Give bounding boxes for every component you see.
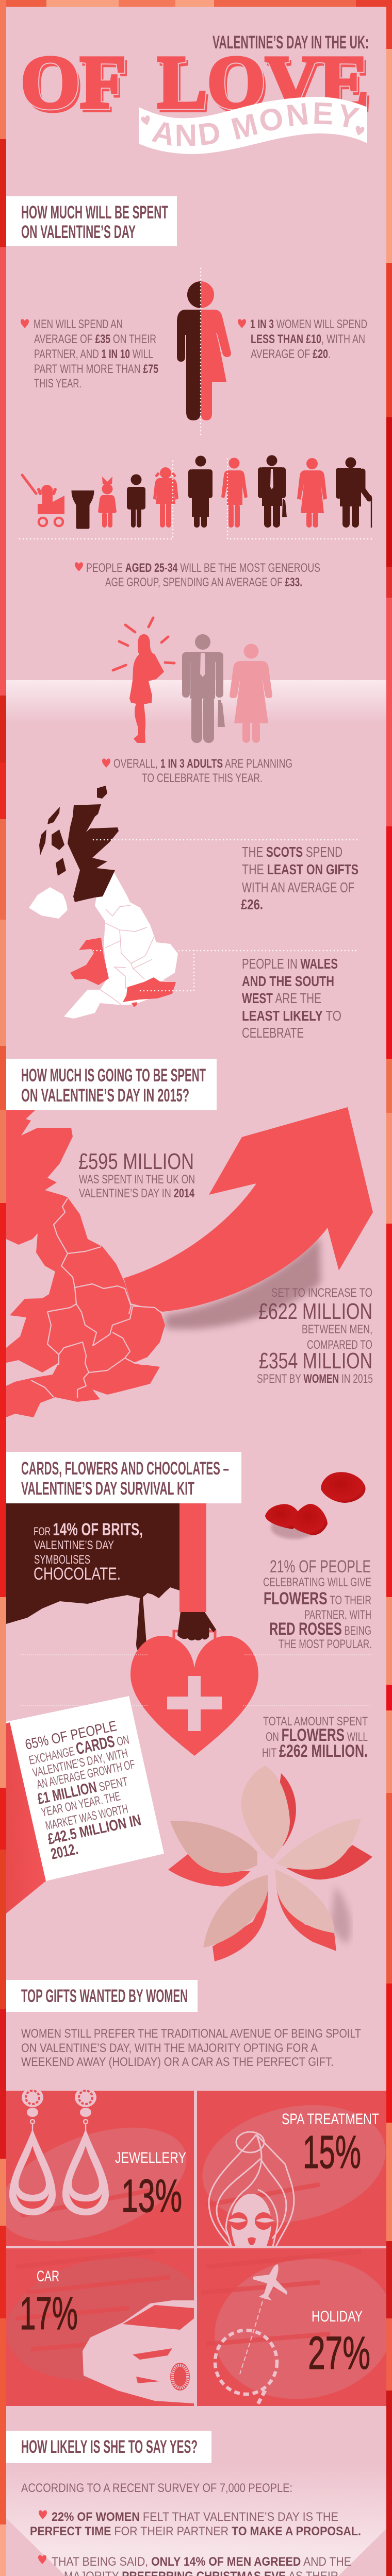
- text: cards: 65% OF PEOPLE: [24, 1718, 118, 1753]
- chocolate panel: [6, 1503, 179, 1652]
- icon: boy: [127, 474, 145, 528]
- figure: man and woman split: [177, 268, 231, 437]
- text: aged 25-34: [75, 561, 320, 589]
- gifts grid: [0, 2088, 392, 2413]
- icon: toddler: [73, 490, 93, 528]
- text: cards: £42.5 MILLION IN: [46, 1811, 142, 1848]
- text: men spending: AVERAGE OF £35 ON THEIR: [34, 332, 156, 346]
- heading: how much will be spent: HOW MUCH WILL BE SPENT: [21, 202, 168, 223]
- heading: say yes: HOW LIKELY IS SHE TO SAY YES?: [21, 2437, 198, 2457]
- text: men spending: PART WITH MORE THAN £75: [34, 362, 158, 376]
- text: increase to 622 million: [257, 1286, 373, 1386]
- text: total flowers: ON FLOWERS WILL: [266, 1725, 368, 1745]
- icon: older woman: [297, 458, 327, 528]
- icon: car: [83, 2300, 194, 2403]
- icon: pram with baby: [22, 475, 64, 526]
- text: cards: [24, 1718, 142, 1863]
- text: 1 in 3 adults: OVERALL, 1 IN 3 ADULTS ARE PLANNING: [113, 757, 292, 771]
- map: region borders: [100, 905, 155, 1005]
- envelope and card: [6, 1696, 164, 1913]
- label: holiday: [308, 2308, 370, 2379]
- label: jewellery: 13%: [121, 2171, 182, 2222]
- heading: how much will be spent: [6, 196, 177, 246]
- text: wales and south west: LEAST LIKELY TO: [242, 1008, 341, 1024]
- heading: how much in 2015: ON VALENTINE’S DAY IN 2015?: [21, 1086, 189, 1106]
- text: survey: 22% OF WOMEN FELT THAT VALENTINE’S DAY IS THE: [52, 2510, 338, 2524]
- icon: spa woman: [209, 2132, 294, 2249]
- label: car: 17%: [20, 2288, 78, 2340]
- heading: say yes: [6, 2431, 211, 2463]
- text: cards: 2012.: [50, 1841, 79, 1863]
- text: scots spend least: £26.: [241, 896, 263, 912]
- icon: earrings: [9, 2088, 109, 2215]
- text: cards: YEAR ON YEAR. THE: [40, 1789, 122, 1820]
- text: wales and south west: PEOPLE IN WALES: [242, 956, 338, 972]
- text: flowers: [263, 1557, 372, 1651]
- main title: of love: [21, 40, 371, 127]
- dividers: [194, 2091, 197, 2406]
- text: cards: MARKET WAS WORTH: [44, 1802, 129, 1833]
- text: 595 million: WAS SPENT IN THE UK ON: [79, 1173, 195, 1187]
- text: women prefer: ON VALENTINE’S DAY, WITH THE MAJORITY OPTING FOR A: [21, 2041, 318, 2055]
- heading: survival kit: VALENTINE’S DAY SURVIVAL KIT: [21, 1479, 194, 1499]
- icon: woman with rays: [113, 618, 174, 743]
- heading: survival kit: [6, 1452, 241, 1503]
- people row: ages: [20, 455, 371, 539]
- text: cards: AN AVERAGE GROWTH OF: [36, 1757, 136, 1792]
- text: women prefer: WEEKEND AWAY (HOLIDAY) OR A CAR AS THE PERFECT GIFT.: [21, 2055, 334, 2069]
- text: scots spend least: [241, 844, 358, 912]
- icon: woman: [230, 644, 272, 743]
- handle: [174, 1631, 215, 1641]
- text: men spending: MEN WILL SPEND AN: [34, 317, 123, 331]
- text: survey: PERFECT TIME FOR THEIR PARTNER TO MAKE A PROPOSAL.: [30, 2524, 361, 2538]
- map: Scotland: [68, 804, 119, 902]
- heart: [130, 1636, 258, 1756]
- text: chocolate: SYMBOLISES: [34, 1553, 90, 1567]
- icon: man: [182, 634, 225, 743]
- text: chocolate: FOR 14% OF BRITS,: [34, 1520, 143, 1539]
- first aid heart with hand: [130, 1503, 258, 1756]
- map: Wales: [70, 938, 109, 985]
- paper flower: [168, 1766, 372, 1961]
- rose petals: [265, 1472, 366, 1539]
- map: South East: [123, 977, 176, 1007]
- petals: red cutouts: [279, 1773, 296, 1846]
- heading: how much will be spent: ON VALENTINE’S DAY: [21, 222, 136, 242]
- light fan from diamond: [6, 2463, 386, 2576]
- text: cards: VALENTINE’S DAY, WITH: [31, 1746, 129, 1780]
- text: 1 in 3 adults: TO CELEBRATE THIS YEAR.: [142, 771, 263, 785]
- map: borders: [31, 1198, 162, 1398]
- grid background: [0, 2089, 392, 2413]
- icon: small girl: [98, 477, 117, 528]
- icon: teen girl: [153, 467, 178, 528]
- floor highlight: [6, 680, 386, 723]
- text: 595 million: VALENTINE’S DAY IN 2014: [79, 1187, 194, 1200]
- main title: of love: LOVE: [157, 40, 369, 124]
- text: women spending: LESS THAN £10, WITH AN: [251, 332, 365, 346]
- map: Northern Ireland: [29, 887, 68, 919]
- label: spa treatment: [282, 2111, 379, 2178]
- icon: plane with route: [215, 2264, 287, 2405]
- map: England: [64, 872, 178, 1019]
- map: irish sea: [6, 1233, 55, 1348]
- text: chocolate: CHOCOLATE.: [34, 1564, 121, 1584]
- text: men spending: [21, 317, 158, 391]
- text: women spending: [238, 317, 367, 361]
- main title: of love: OF: [21, 40, 126, 124]
- map: UK regions: [29, 786, 358, 1019]
- icon: old man with cane: [336, 457, 371, 528]
- text: scots spend least: THE LEAST ON GIFTS: [242, 861, 358, 877]
- icon: young woman: [221, 457, 248, 528]
- figures: celebrating adults: [113, 618, 272, 743]
- title block: [21, 32, 371, 154]
- main title: of love: OF: [23, 44, 129, 127]
- growth arrow: [124, 1107, 373, 1329]
- label: car: CAR: [37, 2268, 59, 2285]
- map: bristol channel: [6, 1360, 59, 1386]
- hand: [177, 1612, 216, 1640]
- text: men spending: PARTNER, AND 1 IN 10 WILL: [34, 347, 153, 361]
- label: holiday: HOLIDAY: [312, 2308, 363, 2325]
- text: flowers: RED ROSES BEING: [269, 1619, 371, 1639]
- text: aged 25-34: PEOPLE AGED 25-34 WILL BE THE MOST GENEROUS: [86, 561, 320, 575]
- label: car: [20, 2268, 78, 2340]
- text: survey: [21, 2481, 361, 2576]
- heading: how much in 2015: HOW MUCH IS GOING TO BE SPENT: [21, 1065, 206, 1086]
- text: 595 million: £595 MILLION: [78, 1149, 194, 1174]
- text: men spending: THIS YEAR.: [34, 377, 81, 391]
- text: aged 25-34: AGE GROUP, SPENDING AN AVERAGE OF £33.: [105, 575, 302, 589]
- label: jewellery: JEWELLERY: [115, 2149, 186, 2166]
- text: cards: EXCHANGE CARDS ON: [27, 1728, 130, 1768]
- heading: top gifts: [6, 1980, 198, 2012]
- heading: top gifts: TOP GIFTS WANTED BY WOMEN: [21, 1986, 188, 2006]
- text: 1 in 3 adults: [102, 757, 292, 785]
- text: cards: £1 MILLION SPENT: [36, 1772, 129, 1808]
- text: women prefer: [21, 2027, 361, 2069]
- map: UK large: [6, 1110, 165, 1417]
- petals: beige: [241, 1766, 290, 1859]
- heading: how much in 2015: [6, 1059, 217, 1110]
- main title: of love: LOVE: [160, 44, 371, 127]
- text: 595 million: [78, 1149, 195, 1200]
- text: increase to 622 million: SPENT BY WOMEN IN 2015: [257, 1372, 373, 1386]
- text: total flowers: [262, 1715, 368, 1761]
- text: survey: THAT BEING SAID, ONLY 14% OF MEN AGREED AND THE: [52, 2555, 351, 2569]
- text: wales and south west: [242, 956, 341, 1041]
- main title: of love: LOVE: [157, 40, 369, 124]
- heading: survival kit: CARDS, FLOWERS AND CHOCOLATES –: [21, 1459, 229, 1479]
- icon: young man: [188, 455, 213, 528]
- text: wales and south west: CELEBRATE: [242, 1025, 304, 1041]
- text: chocolate: VALENTINE’S DAY: [34, 1538, 114, 1552]
- text: survey: ACCORDING TO A RECENT SURVEY OF 7,000 PEOPLE:: [21, 2481, 292, 2495]
- sleeve: [179, 1503, 206, 1612]
- icon: businessman: [258, 455, 287, 528]
- text: women spending: AVERAGE OF £20.: [251, 347, 331, 361]
- text: wales and south west: AND THE SOUTH: [242, 973, 334, 989]
- text: wales and south west: WEST ARE THE: [242, 990, 321, 1006]
- text: chocolate: [34, 1520, 143, 1584]
- main title: of love: OF: [21, 40, 126, 124]
- text: flowers: FLOWERS TO THEIR: [264, 1589, 371, 1608]
- text: scots spend least: THE SCOTS SPEND: [242, 844, 342, 860]
- banner: and money: AND MONEY: [152, 102, 360, 146]
- label: jewellery: [115, 2149, 186, 2222]
